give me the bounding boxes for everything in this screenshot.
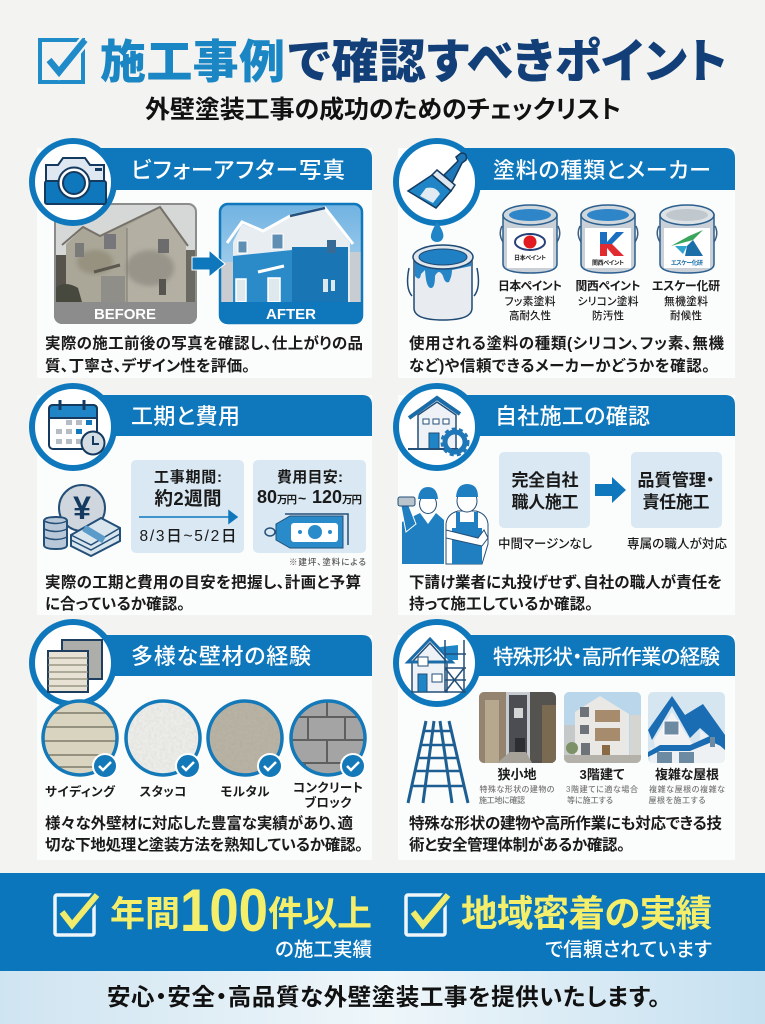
heading bar: special shapes	[464, 635, 735, 676]
icon: two workers	[398, 484, 488, 564]
labels: special cases: 狭小地	[498, 767, 536, 782]
icon: yen coin and money	[44, 485, 120, 556]
card: quality control: 品質管理・	[638, 470, 714, 490]
labels: wall materials: コンクリート	[293, 781, 363, 795]
labels: paint makers: シリコン塗料	[578, 294, 639, 308]
icon: paint brush	[396, 141, 478, 223]
heading bar: wall materials	[100, 635, 372, 676]
labels: paint makers	[498, 279, 720, 322]
card: construction period: 約2週間	[154, 488, 222, 509]
icon: wall samples	[32, 622, 114, 704]
icon: footer checkbox one	[55, 895, 97, 935]
labels: wall materials: サイディング	[45, 784, 116, 799]
heading bar: schedule: 工期と費用	[131, 404, 240, 429]
footer band: closing message: 安心・安全・高品質な外壁塗装工事を提供いたします。	[107, 984, 660, 1010]
icon: price tag	[265, 514, 348, 548]
panel: paint types and makers	[396, 141, 735, 378]
callout: 100 projects per year: 100	[180, 877, 268, 944]
icon: title checkbox	[40, 40, 85, 82]
labels: wall materials: モルタル	[220, 785, 270, 799]
panel: before and after photos	[32, 141, 372, 378]
callout: local track record	[461, 893, 712, 961]
text: special shapes description	[409, 814, 722, 854]
heading bar: in-house: 自社施工の確認	[495, 404, 650, 429]
labels: special cases: 複雑な屋根	[655, 767, 719, 782]
labels: special cases: 3階建て	[580, 767, 625, 782]
labels: paint makers: 日本ペイント	[498, 279, 562, 293]
labels: special cases: 特殊な形状の建物の	[480, 784, 555, 794]
material: stucco	[126, 701, 200, 778]
arrow: before to after	[192, 250, 225, 277]
labels: wall materials: ブロック	[304, 795, 352, 810]
arrow: in-house to quality	[595, 477, 626, 503]
card: fully in-house craftsmen: 完全自社	[512, 470, 578, 490]
icon: Kansai Paint can	[578, 205, 638, 273]
captions: in-house	[498, 536, 727, 551]
labels: special cases: 3階建てに適な場合	[566, 784, 638, 794]
text: schedule description	[45, 572, 361, 613]
text: special shapes description: 術と安全管理体制があるか確認。	[409, 835, 625, 854]
title: で確認すべきポイント	[288, 35, 727, 88]
heading bar: wall materials: 多様な壁材の経験	[131, 644, 311, 669]
callout: 100 projects per year	[110, 877, 372, 961]
icon: large paint bucket	[408, 245, 478, 320]
title: 施工事例	[100, 36, 285, 88]
labels: special cases	[479, 767, 725, 805]
icon: Nippon Paint can: 日本ペイント	[514, 254, 546, 262]
callout: 100 projects per year: 件以上	[268, 895, 372, 934]
text: in-house description	[409, 572, 722, 613]
card: cost estimate	[253, 460, 366, 553]
panel: schedule and cost	[32, 386, 372, 615]
photo: three-storey house	[564, 692, 641, 763]
subtitle: 外壁塗装工事の成功のためのチェックリスト	[145, 96, 621, 124]
material: concrete block	[290, 700, 370, 780]
photo: after: AFTER	[266, 306, 316, 323]
callout: local track record: で信頼されています	[545, 939, 712, 961]
footer band: achievements	[0, 873, 765, 971]
heading bar: schedule	[100, 395, 372, 436]
text: wall materials description: 様々な外壁材に対応した豊富な実績があり、適	[45, 814, 353, 832]
labels: special cases: 屋根を施工する	[648, 795, 706, 805]
panel: special shapes and high places	[396, 622, 735, 860]
card: construction period	[131, 460, 244, 553]
icon: house and gear	[396, 386, 478, 468]
icon: SK Kaken can: エスケー化研	[671, 259, 703, 267]
photo: before	[54, 203, 197, 324]
icon: Nippon Paint can	[500, 205, 560, 273]
photo: complex roof	[648, 692, 725, 763]
labels: wall materials	[45, 781, 363, 810]
icon: SK Kaken can	[657, 205, 717, 273]
labels: paint makers: フッ素塗料	[504, 294, 556, 308]
text: special shapes description: 特殊な形状の建物や高所作業にも対応できる技	[409, 814, 722, 832]
labels: special cases: 複雑な屋根の複雑な	[649, 784, 725, 794]
text: before after description: 質、丁寧さ、デザイン性を評価。	[45, 356, 250, 375]
panel: in-house construction	[396, 386, 735, 615]
heading bar: before after: ビフォーアフター写真	[131, 158, 345, 183]
card: cost estimate: 万円	[342, 494, 362, 506]
icon: camera	[32, 141, 114, 223]
captions: in-house: 専属の職人が対応	[627, 536, 727, 551]
card: cost estimate: 120	[312, 487, 342, 507]
callout: 100 projects per year: の施工実績	[275, 939, 372, 961]
heading bar: before after	[100, 148, 372, 190]
text: schedule description: に合っているか確認。	[45, 594, 185, 613]
photo: after	[219, 203, 363, 324]
panel: wall material experience	[32, 622, 372, 860]
icon: house with scaffolding	[396, 622, 478, 704]
text: wall materials description: 切な下地処理と塗装方法を熟知しているか確認。	[45, 835, 363, 854]
text: paint description: 使用される塗料の種類(シリコン、フッ素、無機	[409, 334, 724, 352]
card: construction period: 8/3日~5/2日	[140, 528, 236, 545]
material: siding	[40, 701, 120, 778]
callout: 100 projects per year: 年間	[110, 895, 180, 934]
photo: before: BEFORE	[94, 306, 156, 323]
card: construction period: 工事期間:	[154, 468, 222, 486]
heading bar: in-house	[464, 395, 735, 436]
text: paint description	[409, 334, 724, 375]
text: before after description: 実際の施工前後の写真を確認し、仕上がりの品	[45, 334, 363, 352]
labels: special cases: 等に施工する	[567, 795, 613, 805]
icon: yen coin and money: ¥	[73, 490, 91, 526]
material: mortar	[208, 701, 282, 778]
card: quality control: 責任施工	[642, 493, 710, 512]
text: wall materials description	[45, 814, 363, 854]
icon: ladder	[408, 721, 468, 803]
heading bar: special shapes: 特殊形状・高所作業の経験	[493, 646, 720, 669]
footer band: closing message	[0, 971, 765, 1024]
card: cost estimate: 80	[257, 487, 277, 507]
labels: special cases: 施工地に確認	[479, 795, 525, 805]
text: before after description	[45, 334, 363, 375]
card: fully in-house craftsmen: 職人施工	[512, 493, 578, 512]
labels: paint makers: 関西ペイント	[576, 279, 640, 293]
card: fully in-house craftsmen	[499, 452, 590, 528]
labels: paint makers: エスケー化研	[652, 279, 720, 293]
card: cost estimate: 費用目安:	[277, 468, 343, 486]
text: schedule description: 実際の工期と費用の目安を把握し、計画と予算	[45, 572, 361, 592]
labels: paint makers: 耐候性	[670, 309, 702, 322]
text: paint description: など)や信頼できるメーカーかどうかを確認。	[409, 356, 710, 375]
text: in-house description: 持って施工しているか確認。	[409, 594, 593, 613]
callout: local track record: 地域密着の実績	[461, 893, 712, 934]
arrow: period	[139, 511, 237, 523]
photo: narrow site	[479, 692, 556, 763]
labels: paint makers: 無機塗料	[664, 294, 708, 308]
card: quality control	[631, 452, 722, 528]
card: cost estimate: 万円	[277, 494, 297, 506]
icon: Kansai Paint can: 関西ペイント	[592, 260, 624, 267]
labels: paint makers: 高耐久性	[509, 309, 552, 322]
footnote: cost: ※建坪、塗料による	[289, 557, 366, 567]
heading bar: paint	[464, 148, 735, 190]
text: in-house description: 下請け業者に丸投げせず、自社の職人が責任を	[409, 572, 722, 592]
icon: paint drop	[431, 222, 443, 242]
card: cost estimate: ~	[298, 490, 306, 506]
captions: in-house: 中間マージンなし	[498, 536, 592, 551]
icon: footer checkbox two	[406, 895, 448, 935]
icon: calendar with clock	[32, 386, 114, 468]
labels: paint makers: 防汚性	[592, 309, 624, 322]
labels: wall materials: スタッコ	[139, 785, 186, 799]
heading bar: paint: 塗料の種類とメーカー	[493, 158, 711, 183]
